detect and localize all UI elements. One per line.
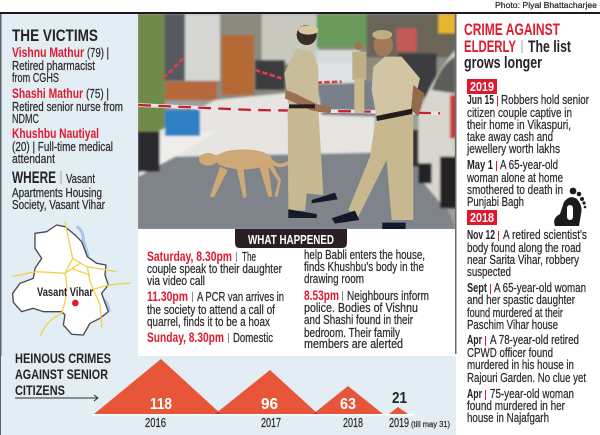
2019 entry: May 1: Punjabi Bagh <box>467 195 524 209</box>
where <box>12 169 105 212</box>
timeline: Sunday 8.30pm: drawing room <box>304 272 364 286</box>
chart heading: AGAINST SENIOR <box>15 366 108 382</box>
victim: Khushbu Nautiyal: (20) | Full-time medical <box>12 140 113 154</box>
where: Vasant <box>66 172 95 186</box>
timeline: 11.30pm <box>147 289 284 329</box>
victim: Shashi Mathur: NDMC <box>12 112 39 126</box>
what happened tab: WHAT HAPPENED <box>248 233 334 247</box>
2019 entry: May 1: smothered to death in <box>467 183 563 197</box>
heading: CRIME AGAINST <box>464 21 560 39</box>
2018 entry: Apr, Najafgarh: found murdered in her <box>467 399 565 413</box>
victim: Shashi Mathur: Shashi Mathur <box>12 86 84 101</box>
victim: Vishnu Mathur: Vishnu Mathur <box>12 45 85 60</box>
background officer <box>352 42 366 113</box>
2018 entry: Sept: Paschim Vihar house <box>467 318 558 332</box>
2018 entry: Apr, Najafgarh: house in Najafgarh <box>467 411 549 425</box>
2019 entry: May 1 <box>466 158 563 209</box>
timeline: 8.53pm: bedroom. Their family <box>304 326 401 340</box>
what happened tab <box>235 229 347 248</box>
2018 tag: 2018 <box>470 210 494 225</box>
2018 entry: Apr, Rajouri Garden: murdered in his house in <box>467 358 574 372</box>
2018 entry: Nov 12 <box>467 228 587 279</box>
2016 triangle: 118 <box>150 396 172 413</box>
chart heading <box>15 350 111 398</box>
timeline: 8.53pm: Neighbours inform <box>347 289 429 303</box>
2018 triangle: 63 <box>340 396 356 413</box>
map of Delhi <box>12 222 131 336</box>
timeline: Sunday 8.30pm: help Babli enters the house, <box>304 248 425 262</box>
timeline: 8.53pm: and Shashi found in their <box>304 313 413 327</box>
where: Society, Vasant Vihar <box>12 198 105 212</box>
heading: The list <box>528 38 571 56</box>
timeline: Saturday 8.30pm: The <box>242 250 256 264</box>
timeline: 11.30pm: A PCR van arrives in <box>197 290 284 304</box>
2018 entry: Apr, Rajouri Garden: Apr <box>467 333 482 347</box>
dog <box>199 149 289 198</box>
2018 entry: Sept: found murdered at their <box>467 306 563 320</box>
timeline: 11.30pm: 11.30pm <box>147 289 188 304</box>
panel: the victims <box>0 14 138 435</box>
2019 entry: May 1: woman alone at home <box>466 171 563 185</box>
icon: footprint <box>554 188 586 226</box>
year labels: 2018 <box>343 416 363 430</box>
victim: Khushbu Nautiyal: attendant <box>12 152 55 166</box>
2018 entry: Sept <box>467 281 586 332</box>
where: Apartments Housing <box>12 186 102 200</box>
top rule <box>0 12 600 14</box>
timeline: 11.30pm: the society to attend a call of <box>147 303 275 317</box>
2019 entry: Jun 15: their home in Vikaspuri, <box>467 118 571 132</box>
2019 entry: Jun 15: take away cash and <box>467 130 553 144</box>
timeline: 8.53pm: 8.53pm <box>304 288 339 303</box>
arrow <box>15 395 98 401</box>
map label: Vasant Vihar <box>37 287 93 299</box>
heading: the victims: THE VICTIMS <box>12 27 98 45</box>
officer left <box>284 25 338 218</box>
timeline: Sunday 8.30pm: Domestic <box>233 331 273 345</box>
2018 entry: Apr, Najafgarh: Apr <box>467 387 482 401</box>
2018 entry: Sept: Sept <box>467 281 488 295</box>
2016 triangle <box>94 359 221 414</box>
2018 entry: Apr, Rajouri Garden <box>467 333 586 385</box>
2019 entry: Jun 15: Jun 15 <box>467 93 494 107</box>
2019 entry: Jun 15: citizen couple captive in <box>467 106 572 120</box>
2017 triangle: 96 <box>261 396 278 413</box>
timeline: Sunday 8.30pm: finds Khushbu's body in the <box>304 260 424 274</box>
timeline: 8.53pm <box>304 288 429 351</box>
panel: crime against elderly <box>464 21 589 425</box>
2019 triangle <box>389 390 408 414</box>
victim: Vishnu Mathur: from CGHS <box>12 71 59 85</box>
photo credit: Photo: Piyal Bhattacharjee <box>495 0 597 10</box>
2018 entry: Apr, Rajouri Garden: CPWD officer found <box>467 346 553 360</box>
year labels: 2016 <box>145 416 166 430</box>
chart heading: CITIZENS <box>15 382 65 398</box>
year labels: (till may 31) <box>411 420 450 429</box>
heading: ELDERLY <box>464 38 516 56</box>
2018 entry: Nov 12: Nov 12 <box>467 228 495 242</box>
timeline: Saturday 8.30pm <box>147 249 282 288</box>
victim: Shashi Mathur: (75) | <box>86 87 109 101</box>
victim: Khushbu Nautiyal <box>12 126 113 166</box>
chart panel: heinous crimes against senior citizens <box>1 350 456 435</box>
cordon tape <box>138 105 440 113</box>
officer right <box>332 30 424 229</box>
victim: Vishnu Mathur: Retired pharmacist <box>12 59 95 73</box>
timeline: Saturday 8.30pm: couple speak to their daughter <box>147 262 282 276</box>
year labels: 2017 <box>261 416 281 430</box>
2019 entry: Jun 15 <box>466 93 589 156</box>
2018 entry: Apr, Rajouri Garden: A 78-year-old retired <box>490 333 579 347</box>
timeline: Saturday 8.30pm: via video call <box>147 274 205 288</box>
chart heading: HEINOUS CRIMES <box>15 350 111 366</box>
timeline: 11.30pm: quarrel, finds it to be a hoax <box>147 315 271 329</box>
2019 entry: Jun 15: jewellery worth lakhs <box>466 142 560 156</box>
triangle chart <box>92 359 414 416</box>
timeline: Sunday 8.30pm: Sunday, 8.30pm <box>147 330 224 345</box>
2017 triangle <box>215 370 318 414</box>
victim: Vishnu Mathur <box>12 45 109 85</box>
victim: Shashi Mathur: Retired senior nurse from <box>12 100 123 114</box>
timeline: 8.53pm: police. Bodies of Vishnu <box>304 301 418 315</box>
heading: grows longer <box>464 54 542 72</box>
2018 triangle <box>313 386 383 414</box>
2018 entry: Apr, Najafgarh: 75-year-old woman <box>490 387 574 401</box>
2018 entry: Apr, Najafgarh <box>467 387 574 425</box>
2019 tag: 2019 <box>470 79 494 94</box>
timeline: Sunday 8.30pm <box>147 248 425 345</box>
2018 entry: Nov 12: suspected <box>467 265 511 279</box>
2019 entry: May 1: A 65-year-old <box>500 158 558 172</box>
timeline: 8.53pm: members are alerted <box>304 337 403 351</box>
victim: Khushbu Nautiyal: Khushbu Nautiyal <box>12 126 99 141</box>
victim: Vishnu Mathur: (79) | <box>87 46 109 60</box>
2019 triangle: 21 <box>392 390 407 407</box>
year labels: 2019 <box>389 416 409 430</box>
heading <box>464 21 571 72</box>
victim: Shashi Mathur <box>12 86 123 126</box>
year labels <box>145 416 450 430</box>
panel: what happened <box>138 14 456 356</box>
where: WHERE <box>12 169 56 187</box>
timeline: Saturday 8.30pm: Saturday, 8.30pm <box>147 249 232 264</box>
photo: police officers and dog at the cordoned street <box>138 14 457 229</box>
2019 entry: May 1: May 1 <box>467 158 493 172</box>
